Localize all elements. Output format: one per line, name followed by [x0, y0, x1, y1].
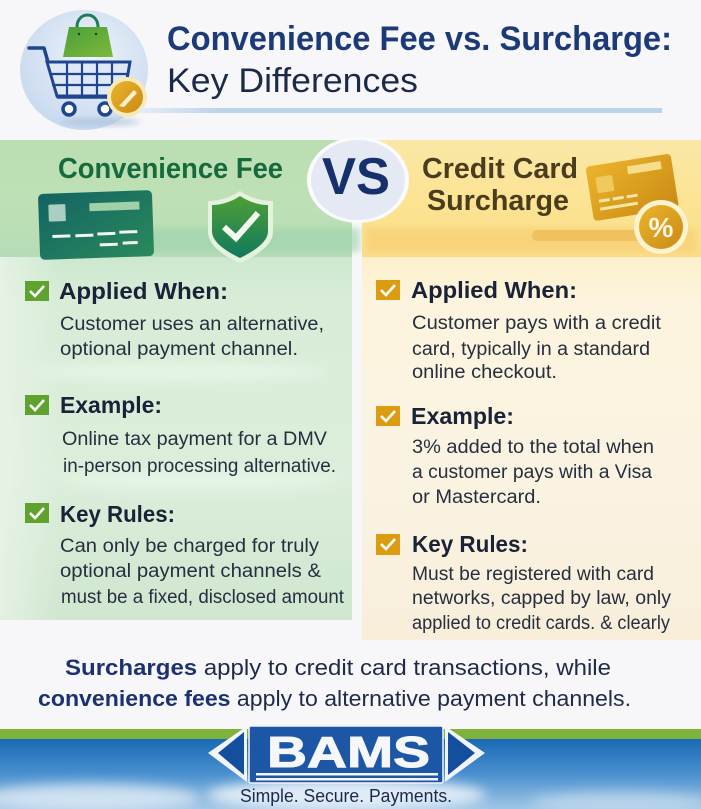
summary text — [38, 655, 631, 711]
tagline: Simple. Secure. Payments. — [240, 786, 452, 806]
item: example — [376, 403, 654, 508]
icon: shopping cart with bag and coin — [20, 10, 148, 130]
item: key rules: must be a fixed, disclosed amount — [61, 587, 345, 608]
footer band — [0, 729, 701, 809]
icon: shield with check — [208, 191, 273, 263]
icon: gold credit card — [585, 153, 679, 221]
item: applied when: Customer pays with a credit — [412, 313, 662, 334]
badge: VS — [307, 137, 409, 223]
title underline — [140, 108, 662, 113]
panel: credit card surcharge — [362, 140, 701, 640]
item: example: in-person processing alternative. — [63, 456, 336, 477]
summary text: convenience fees apply to alternative payment channels. — [38, 686, 631, 711]
icon: percent coin — [634, 200, 688, 254]
title: Convenience Fee vs. Surcharge: — [167, 20, 672, 58]
item: applied when: Applied When: — [59, 278, 228, 304]
icon: green credit card — [38, 190, 154, 260]
logo: BAMS: BAMS — [267, 728, 430, 777]
item: example: Example: — [411, 403, 514, 429]
summary text: Surcharges apply to credit card transactions, while — [65, 655, 611, 680]
item: example: Online tax payment for a DMV — [62, 429, 327, 450]
item: example: or Mastercard. — [412, 487, 541, 508]
item: applied when — [376, 277, 662, 383]
item: key rules — [25, 501, 345, 608]
panel heading: credit card surcharge — [422, 153, 578, 217]
item: key rules: applied to credit cards. & clearly — [412, 613, 670, 634]
panel: convenience fee — [0, 140, 360, 620]
item: key rules: Key Rules: — [60, 501, 175, 527]
item: key rules: Can only be charged for truly — [60, 536, 320, 557]
logo: BAMS — [208, 726, 485, 783]
item: example: Example: — [60, 392, 162, 418]
item: key rules: networks, capped by law, only — [412, 588, 672, 609]
item: applied when: card, typically in a standard — [412, 339, 650, 360]
item: example: 3% added to the total when — [412, 437, 654, 458]
title — [167, 20, 672, 100]
item: applied when: Applied When: — [411, 277, 577, 303]
panel heading: credit card surcharge: Surcharge — [427, 185, 569, 217]
title: Key Differences — [167, 62, 418, 100]
panel heading: credit card surcharge: Credit Card — [422, 153, 578, 185]
icon: percent coin: % — [649, 212, 674, 243]
item: key rules: optional payment channels & — [60, 561, 321, 582]
badge: VS: VS — [322, 148, 390, 206]
panel heading: convenience fee: Convenience Fee — [58, 153, 283, 185]
item: applied when: Customer uses an alternative, — [60, 314, 324, 335]
item: key rules: Must be registered with card — [412, 564, 654, 585]
item: applied when — [25, 278, 324, 360]
item: applied when: optional payment channel. — [60, 339, 298, 360]
item: key rules: Key Rules: — [412, 531, 528, 557]
item: key rules — [376, 531, 672, 634]
item: example — [25, 392, 336, 477]
item: applied when: online checkout. — [412, 362, 557, 383]
item: example: a customer pays with a Visa — [412, 462, 652, 483]
